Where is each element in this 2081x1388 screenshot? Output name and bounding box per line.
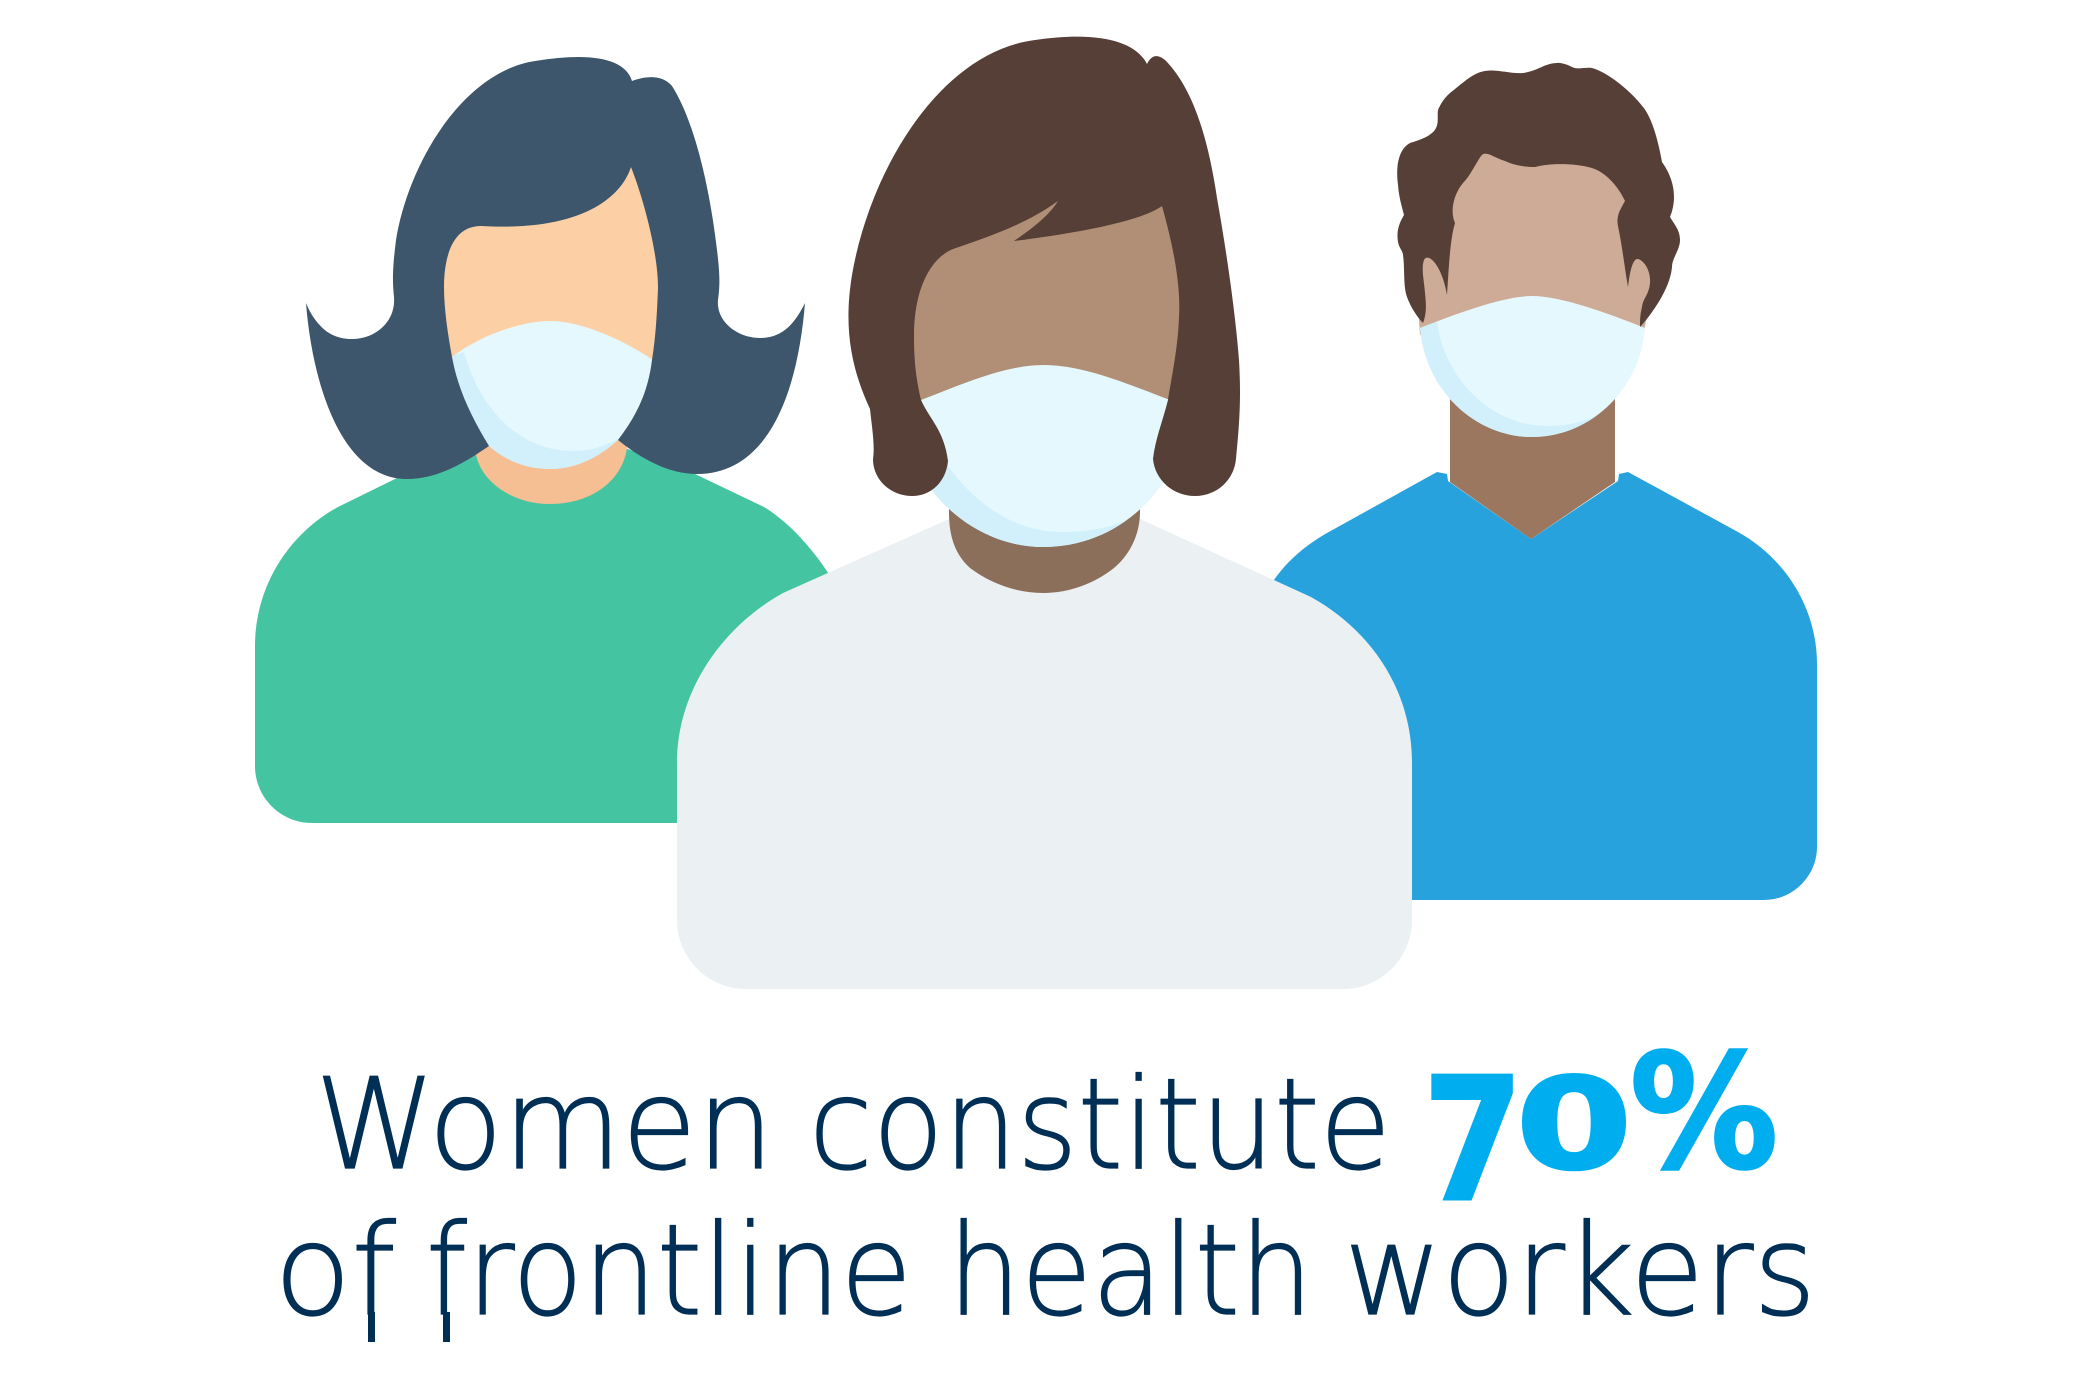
headline line two: workers (1344, 1197, 1816, 1344)
hair (306, 57, 805, 479)
blue top (1260, 472, 1817, 900)
figure: left woman with green top (255, 57, 860, 823)
headline line one: constitute (809, 1051, 1391, 1198)
mask shading (1420, 322, 1596, 437)
face (1415, 150, 1655, 335)
green top (255, 420, 860, 823)
headline (274, 1021, 1816, 1344)
face mask (921, 365, 1170, 547)
headline line one (315, 1051, 1391, 1198)
mask shading (932, 466, 1127, 547)
headline line two: health (948, 1197, 1313, 1344)
face mask (452, 321, 653, 469)
neck (1450, 395, 1615, 539)
headline line one: Women (315, 1051, 774, 1198)
neck (949, 500, 1140, 593)
figure: centre woman with pale grey top (677, 37, 1412, 989)
hair (1397, 63, 1680, 327)
pale grey top (677, 470, 1412, 989)
face (440, 160, 665, 380)
headline line two (274, 1197, 1816, 1344)
headline line two: frontline (426, 1197, 912, 1344)
headline line two: of (274, 1197, 396, 1344)
hair (848, 37, 1240, 496)
neck (476, 440, 627, 504)
digit zero: 0 (1516, 1051, 1632, 1198)
figure: right man with blue top (1260, 63, 1817, 900)
digit seven: 7 (1423, 1042, 1523, 1240)
70 percent statistic (1423, 1021, 1778, 1240)
face mask (1420, 296, 1645, 437)
percent sign: % (1630, 1021, 1778, 1205)
face (900, 180, 1190, 410)
mask shading (452, 352, 619, 469)
